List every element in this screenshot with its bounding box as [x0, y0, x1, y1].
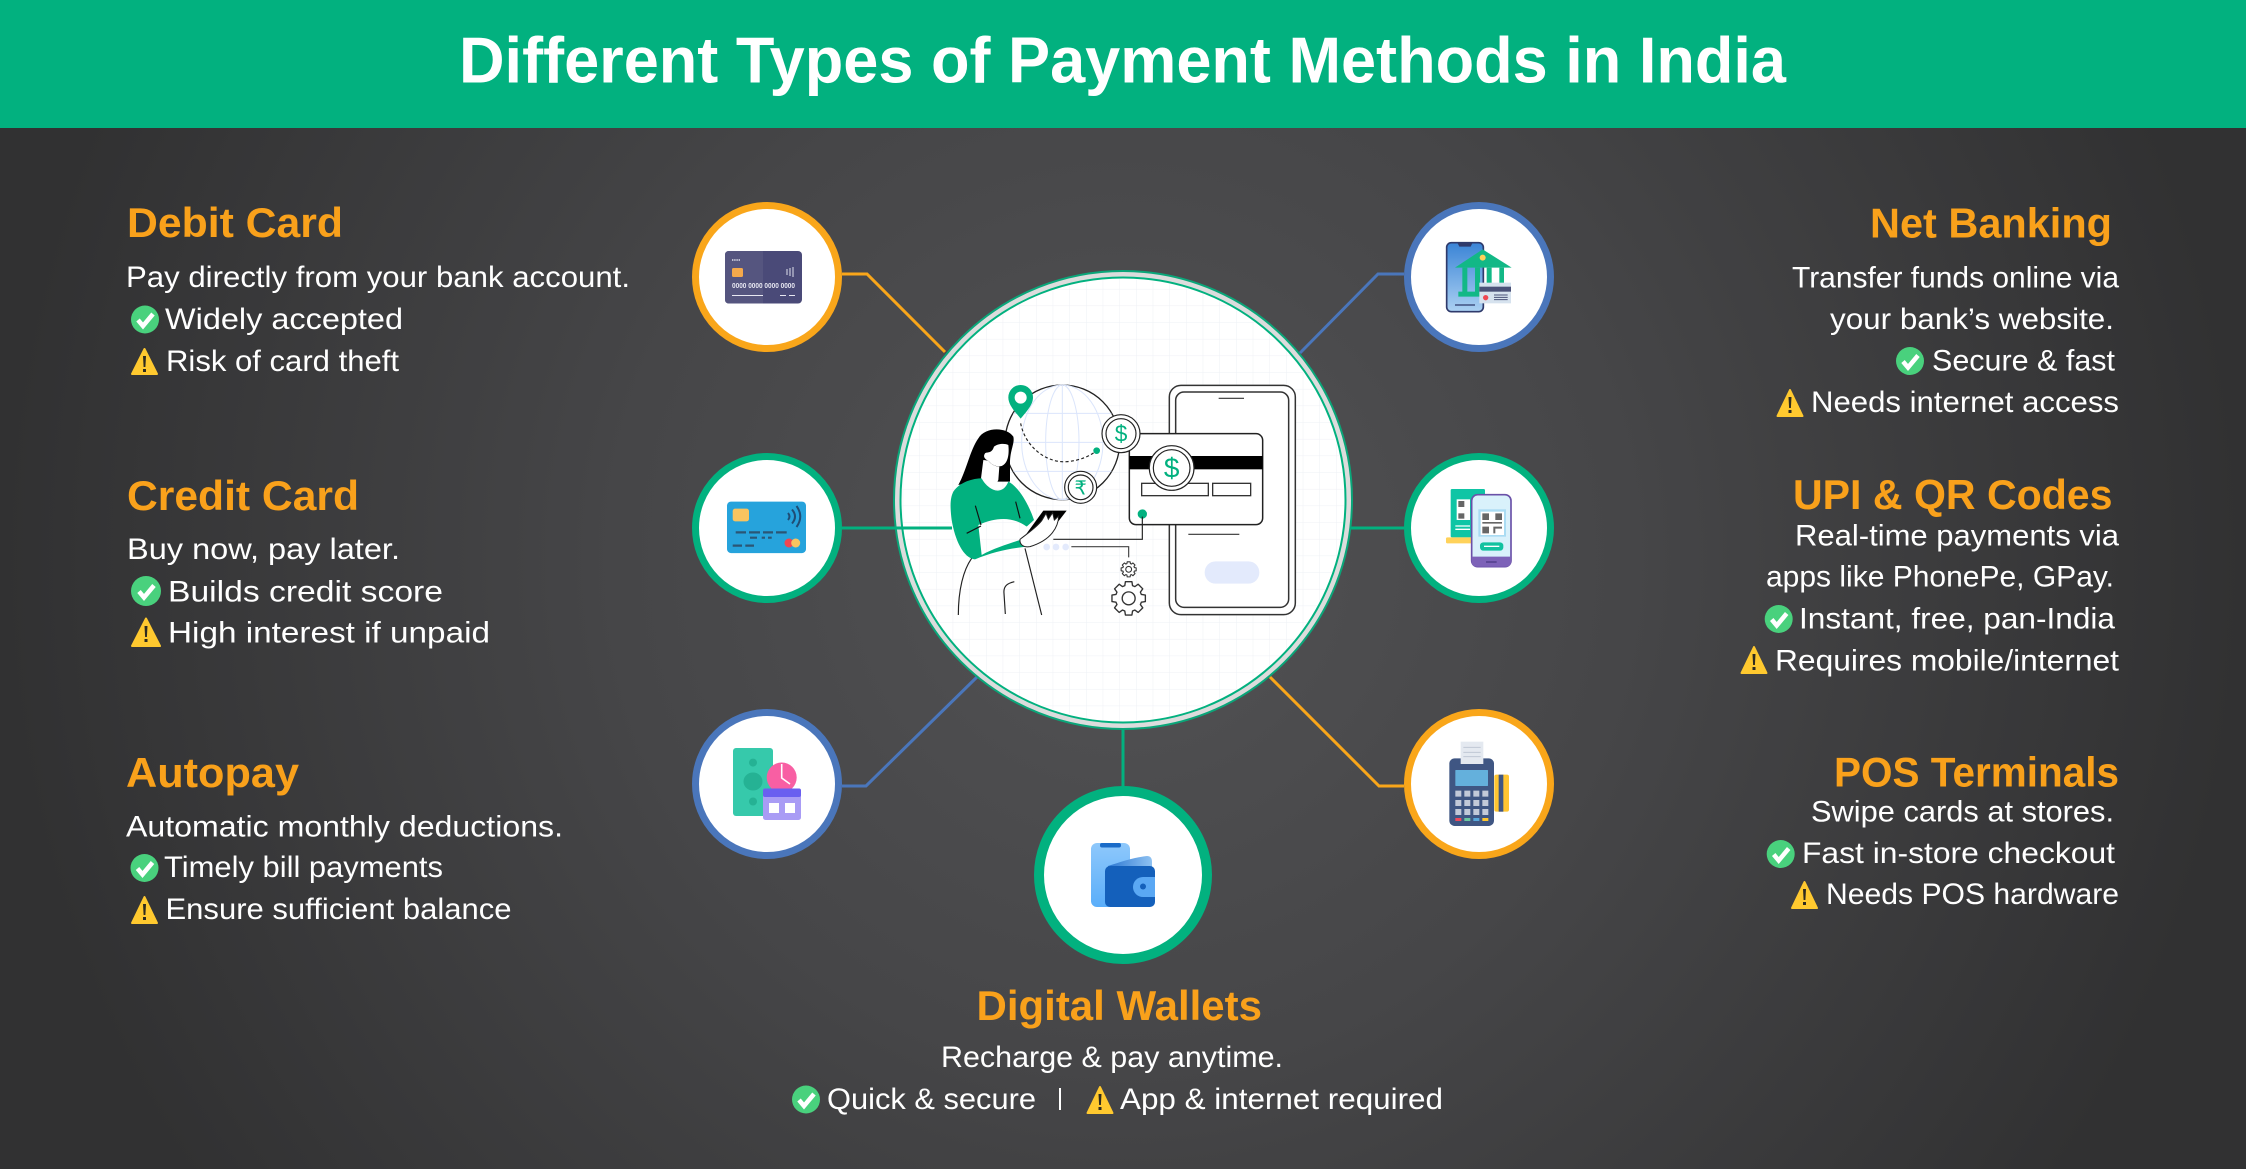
con: needs POS hardware: Needs POS hardware	[1826, 878, 2119, 911]
description: digital wallets: Recharge & pay anytime.	[941, 1041, 1283, 1074]
heading: net banking: Net Banking	[1870, 200, 2112, 246]
description: UPI line 1: Real-time payments via	[1795, 520, 2119, 552]
connector: UPI	[1350, 526, 1404, 530]
heading: POS terminals: POS Terminals	[1834, 748, 2119, 796]
coin: dollar small: $	[1115, 421, 1128, 447]
coin: rupee	[1065, 471, 1097, 503]
connector: digital wallets	[1122, 728, 1124, 790]
node: debit card icon: 0000 0000 0000 0000	[732, 283, 795, 290]
node: credit card icon	[696, 456, 838, 600]
node: digital wallet icon	[1039, 791, 1207, 959]
con: needs internet access: Needs internet access	[1811, 386, 2119, 419]
coin: rupee: ₹	[1075, 476, 1087, 499]
panel: credit card	[127, 472, 490, 650]
payment card	[1053, 434, 1263, 539]
panel: debit card	[126, 199, 630, 378]
panel: net banking	[1778, 200, 2119, 419]
heading: autopay: Autopay	[126, 749, 300, 796]
description: autopay: Automatic monthly deductions.	[126, 810, 563, 844]
pro: instant free pan-India: Instant, free, pan-India	[1799, 602, 2115, 636]
node: net banking icon	[1408, 206, 1550, 348]
separator	[1059, 1088, 1061, 1110]
con: ensure sufficient balance: Ensure sufficient balance	[166, 893, 511, 926]
panel: digital wallets	[792, 982, 1443, 1116]
connector: debit card	[842, 274, 945, 352]
con: app and internet required: App & internet required	[1120, 1083, 1443, 1116]
connector: credit card	[842, 526, 952, 530]
description: credit card: Buy now, pay later.	[127, 533, 400, 566]
globe	[1005, 385, 1120, 500]
connector dots and gears	[1043, 544, 1145, 615]
description: POS terminals: Swipe cards at stores.	[1811, 796, 2114, 828]
central illustration	[894, 271, 1352, 729]
title: Different Types of Payment Methods in India	[459, 24, 1787, 96]
pro: fast in-store checkout: Fast in-store checkout	[1802, 837, 2116, 870]
header banner	[0, 0, 2246, 128]
heading: credit card: Credit Card	[127, 472, 359, 519]
heading: debit card: Debit Card	[127, 199, 343, 246]
coin: dollar large: $	[1164, 453, 1180, 484]
pro: quick and secure: Quick & secure	[827, 1083, 1036, 1116]
coin: dollar small	[1102, 415, 1140, 453]
con: requires mobile/internet: Requires mobile/internet	[1775, 644, 2120, 678]
phone	[1169, 385, 1295, 615]
panel: UPI and QR codes	[1742, 471, 2120, 678]
node: UPI and QR icon	[1408, 456, 1550, 600]
heading: digital wallets: Digital Wallets	[976, 982, 1262, 1029]
location pin	[1008, 385, 1033, 419]
woman with tablet	[951, 429, 1067, 615]
coin: dollar large	[1149, 446, 1194, 490]
panel: autopay	[126, 749, 563, 926]
con: high interest if unpaid: High interest if unpaid	[168, 616, 490, 650]
node: debit card icon	[696, 206, 838, 348]
con: risk of card theft: Risk of card theft	[166, 345, 400, 378]
description: UPI line 2: apps like PhonePe, GPay.	[1766, 560, 2114, 594]
pro: widely accepted: Widely accepted	[165, 303, 403, 336]
pro: timely bill payments: Timely bill payments	[164, 851, 443, 884]
heading: UPI and QR codes: UPI & QR Codes	[1793, 471, 2112, 518]
node: POS terminal icon	[1408, 712, 1550, 856]
node: autopay icon	[696, 712, 838, 856]
description: debit card: Pay directly from your bank account.	[126, 261, 630, 294]
connector: autopay	[842, 677, 977, 786]
description: net banking line 2: your bank’s website.	[1830, 303, 2114, 336]
connector: POS terminals	[1270, 677, 1404, 786]
description: net banking line 1: Transfer funds online via	[1792, 262, 2119, 294]
connector: net banking	[1300, 274, 1404, 353]
pro: secure and fast: Secure & fast	[1932, 344, 2116, 378]
pro: builds credit score: Builds credit score	[168, 576, 443, 608]
panel: POS terminals	[1767, 748, 2119, 911]
